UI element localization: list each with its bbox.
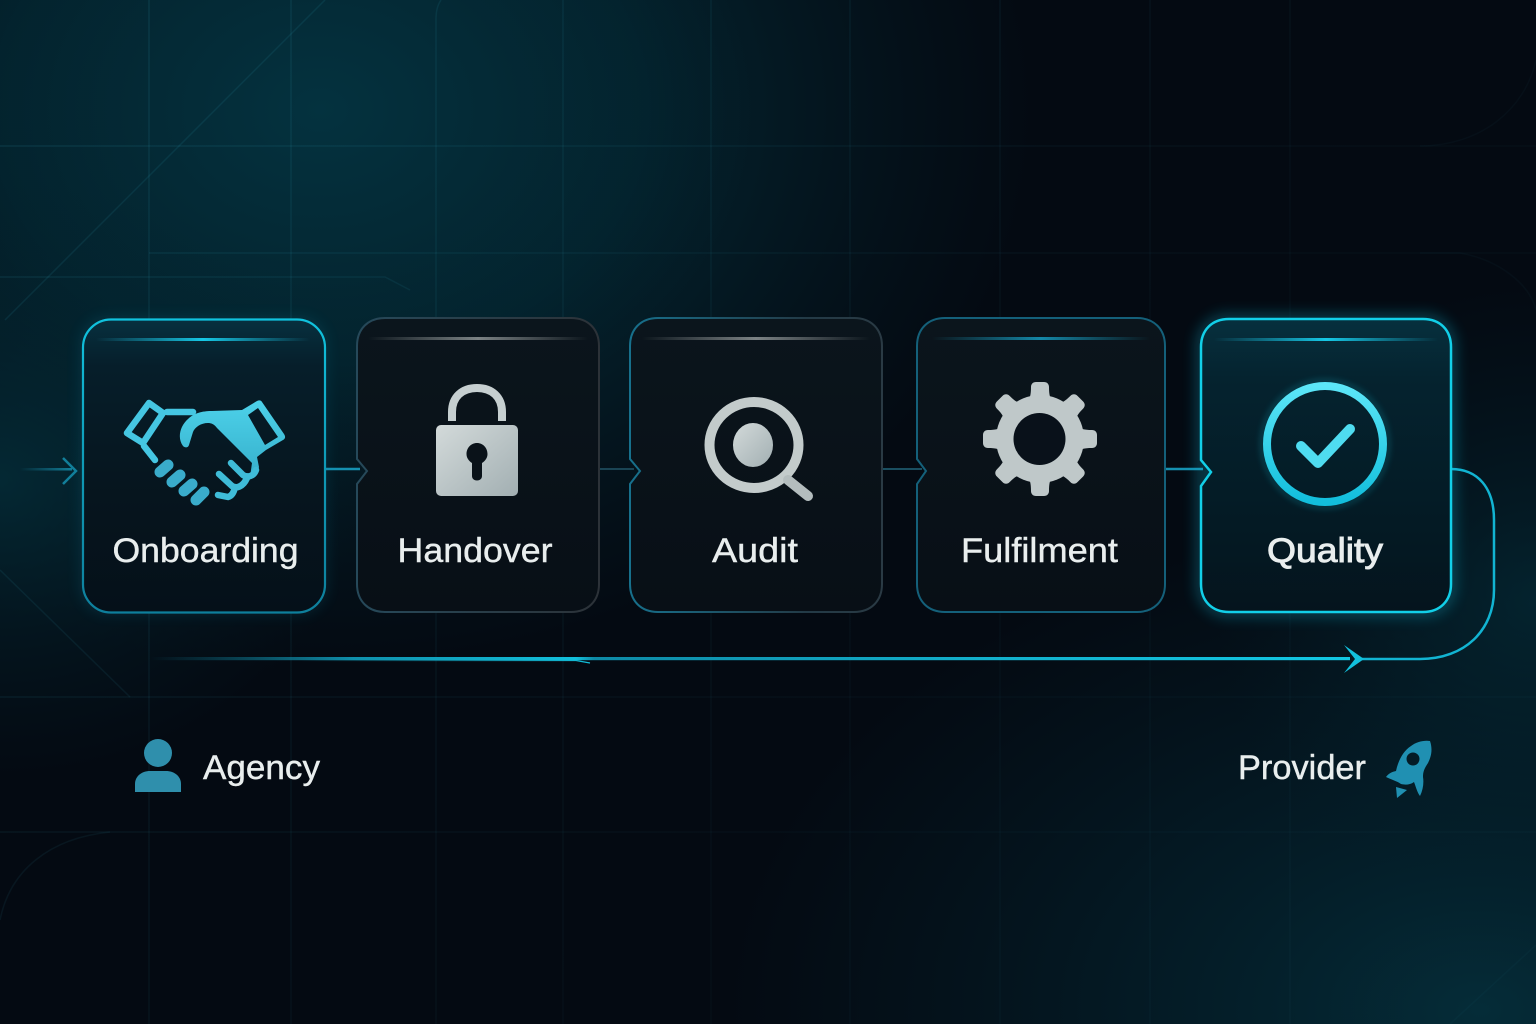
label: Onboarding: Onboarding bbox=[112, 532, 298, 570]
icon: magnifier bbox=[710, 402, 808, 496]
agency group bbox=[135, 739, 320, 792]
icon: check circle bbox=[1262, 381, 1388, 507]
card: audit bbox=[630, 318, 882, 612]
icon: gear bbox=[983, 382, 1097, 496]
card: fulfilment bbox=[917, 318, 1165, 612]
label: Provider: Provider bbox=[1238, 749, 1366, 787]
icon: padlock bbox=[436, 388, 518, 496]
card: handover bbox=[357, 318, 599, 612]
icon: person bbox=[135, 739, 181, 792]
provider group bbox=[1238, 741, 1431, 798]
label: Audit: Audit bbox=[712, 532, 799, 570]
connector: fulfilment to quality bbox=[1165, 468, 1203, 470]
icon: handshake bbox=[127, 400, 285, 500]
icon: rocket bbox=[1386, 741, 1431, 798]
label: Handover: Handover bbox=[398, 532, 552, 570]
label: Fulfilment: Fulfilment bbox=[961, 532, 1119, 570]
label: Quality: Quality bbox=[1267, 532, 1383, 570]
connector: audit to fulfilment bbox=[882, 468, 922, 470]
connector: incoming arrow bbox=[20, 458, 76, 484]
connector: return line with arrow bbox=[150, 469, 1494, 673]
connector: onboarding to handover bbox=[325, 468, 360, 470]
card: onboarding bbox=[78, 315, 329, 616]
label: Agency: Agency bbox=[203, 749, 320, 787]
connector: handover to audit bbox=[599, 468, 634, 470]
card: quality bbox=[1194, 312, 1458, 619]
